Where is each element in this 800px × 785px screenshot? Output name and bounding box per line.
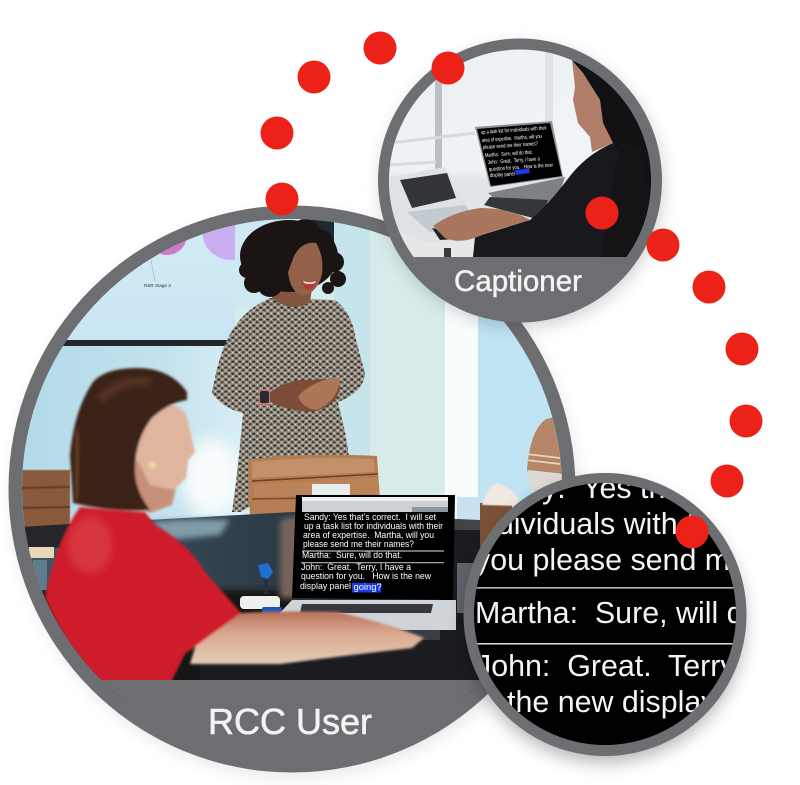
table right side (200, 530, 480, 700)
highlighted word (352, 583, 381, 592)
caption text: question for you. How is the new (301, 570, 431, 581)
magnified caption text: you please send me (475, 543, 747, 577)
red dotted arc (260, 32, 762, 548)
magnified caption text: ndividuals with their (480, 507, 745, 541)
bright window gap (182, 438, 242, 518)
highlighted word (515, 168, 530, 175)
label: Captioner: Captioner (454, 265, 582, 298)
blazer (470, 143, 660, 262)
caption text: Sandy: Yes that’s correct. I will set (304, 511, 436, 522)
hair (570, 48, 660, 262)
meeting room photo (22, 219, 562, 700)
neck and chest (272, 291, 312, 308)
caption text: please send me their names? (303, 538, 414, 549)
smile (301, 280, 318, 290)
magnified caption text: Martha: Sure, will do (475, 596, 760, 630)
captioner photo (389, 50, 651, 262)
circle shadow (382, 46, 662, 326)
white roll (240, 596, 282, 613)
blue shelf (457, 497, 480, 520)
laptop (475, 121, 565, 220)
face (288, 243, 322, 296)
mug (312, 484, 350, 496)
panel: magnified captions circle (464, 471, 760, 762)
magnified caption text: the new display (507, 685, 717, 719)
tiny caption text: area of expertise. Martha, will you (482, 134, 542, 144)
caption text: John: Great. Terry, I have a (301, 561, 412, 572)
tiny caption text: John: Great. Terry, I have a (488, 156, 540, 166)
neck (132, 460, 180, 513)
circle shadow (466, 484, 744, 762)
panel: Captioner circle (378, 38, 662, 327)
caption band (380, 257, 660, 327)
red top (45, 507, 241, 690)
hands and watch (259, 378, 340, 412)
marker (258, 563, 273, 594)
left wall (20, 346, 245, 526)
caption text: area of expertise. Martha, will you (303, 529, 434, 540)
laptop base (278, 600, 456, 630)
hands (433, 208, 530, 241)
magnified caption text (470, 471, 760, 719)
browser bar (302, 501, 448, 512)
laptop screen (292, 495, 455, 600)
standing woman dress (212, 298, 365, 512)
hair (70, 368, 187, 510)
chair behind table (248, 455, 381, 518)
circle frame (464, 473, 746, 756)
seated woman (45, 368, 424, 690)
caption text: up a task list for individuals with their (304, 520, 443, 531)
right person arm (527, 418, 562, 480)
magnified caption text: John: Great. Terry (476, 649, 736, 683)
caption band (102, 680, 480, 704)
wall display: R&R Stage 3 (144, 283, 171, 288)
wall display (63, 220, 276, 346)
table (28, 512, 480, 698)
tiny caption text: question for you. How is the new (489, 163, 553, 173)
circle shadow (14, 214, 576, 776)
steno machine (390, 167, 477, 262)
caption text: Martha: Sure, will do that. (302, 549, 402, 560)
panel: RCC User circle (0, 185, 600, 780)
tiny caption text: Martha: Sure, will do that. (485, 150, 533, 159)
black screen (474, 483, 736, 745)
dark column behind hair (303, 219, 334, 242)
magnified caption text: y: Yes that’s (542, 471, 712, 505)
left chair (20, 470, 70, 530)
captioner woman (433, 48, 660, 262)
tiny caption text (481, 125, 553, 179)
dots (364, 32, 396, 64)
caption text: display panel (300, 580, 351, 591)
tiny caption text: display panel (490, 171, 515, 179)
face (135, 405, 195, 490)
right walls (235, 219, 303, 260)
circle frame (378, 38, 662, 322)
forearm (190, 611, 424, 664)
face and neck (572, 60, 613, 152)
tiny caption text: up a task list for individuals with their (481, 125, 547, 136)
laptop screen: going? (354, 581, 382, 592)
tissue box (480, 503, 512, 547)
label: RCC User: RCC User (208, 701, 372, 742)
paper and folder on left (29, 547, 54, 558)
tiny caption text: please send me their names? (483, 141, 538, 151)
caption text (300, 511, 443, 591)
window frames (385, 48, 565, 260)
curly hair (239, 219, 346, 297)
circle frame (8, 206, 576, 772)
